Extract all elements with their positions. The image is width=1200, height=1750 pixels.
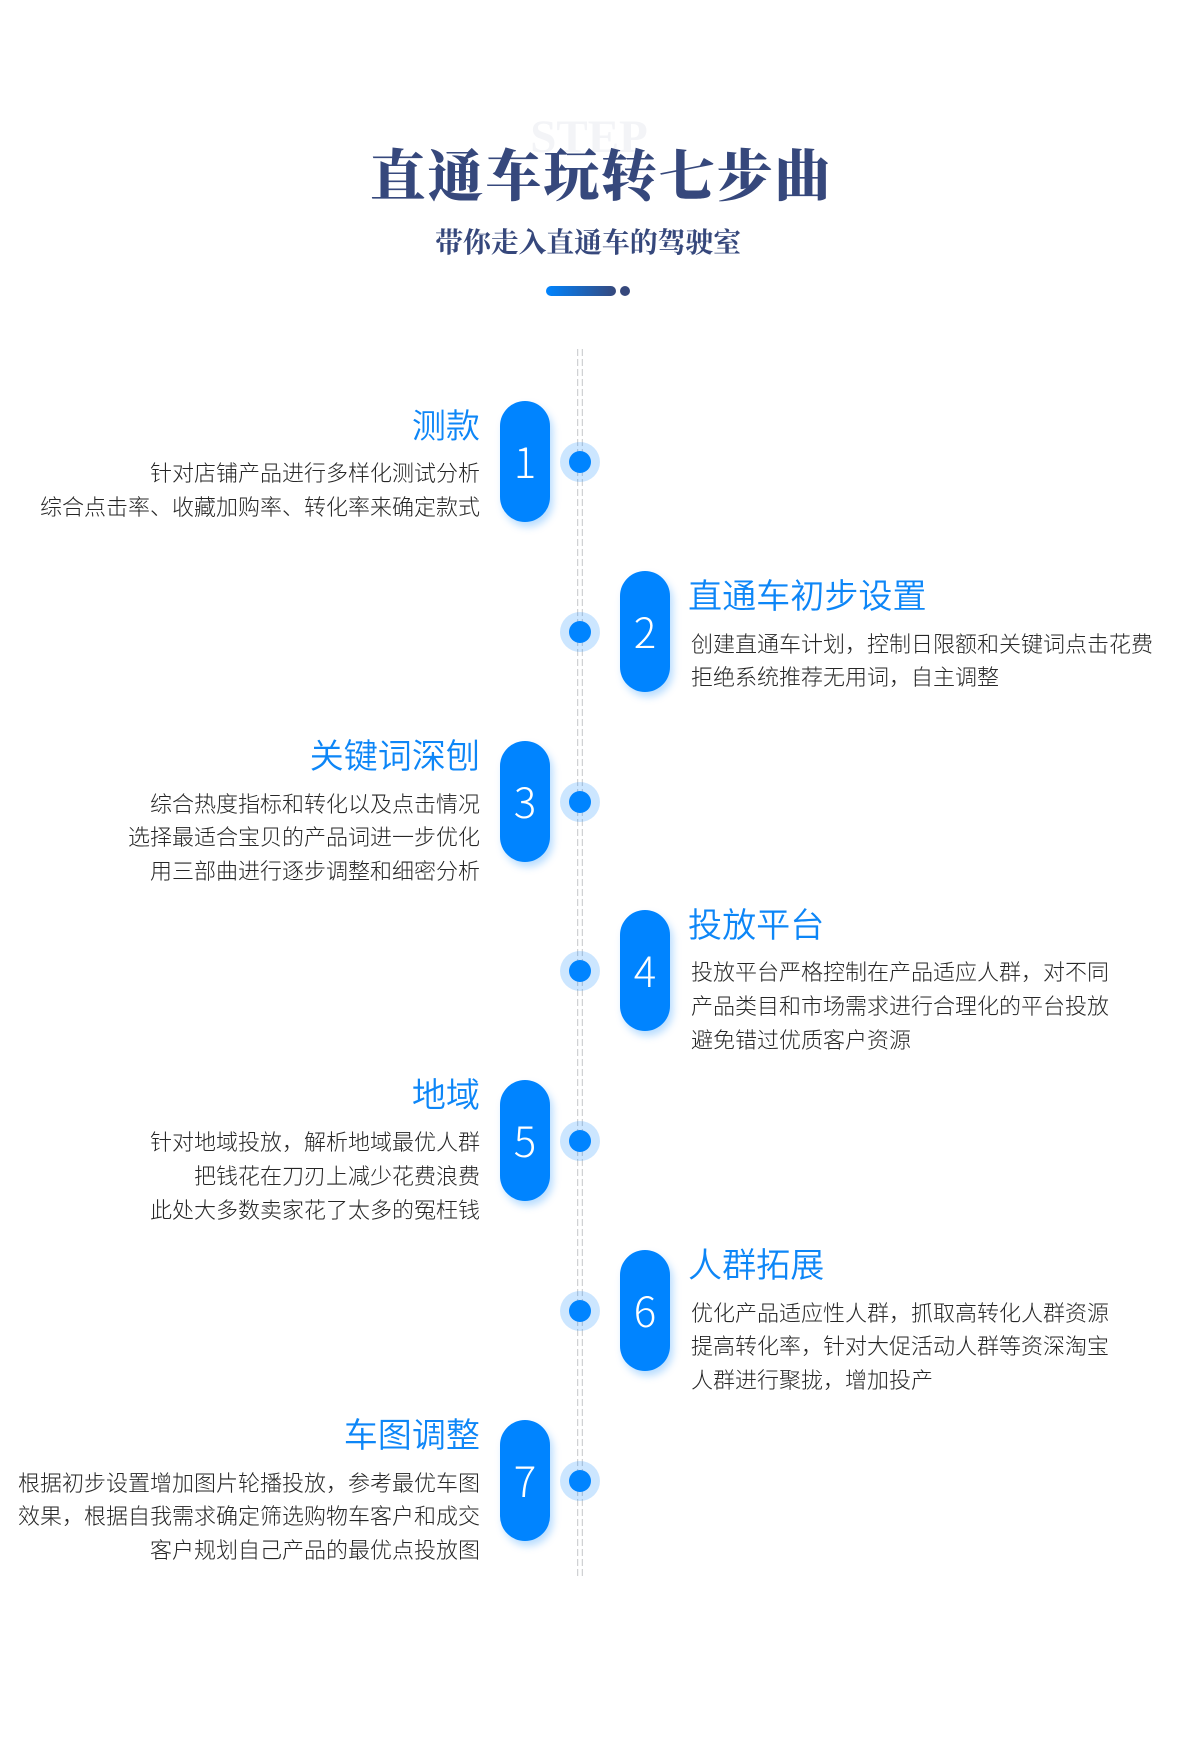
step 4 heading: 投放平台 [688,906,824,944]
step 5 description: 把钱花在刀刃上减少花费浪费 [194,1164,480,1189]
step 6 number pill [620,1250,670,1371]
step 7 number pill: 7 [514,1449,536,1510]
step 1 description [40,461,480,520]
step 1 description: 综合点击率、收藏加购率、转化率来确定款式 [40,495,480,520]
step 2 heading: 直通车初步设置 [688,578,927,616]
step 1 number pill: 1 [514,430,536,491]
subtitle: 带你走入直通车的驾驶室 [435,228,741,258]
step 5 description: 针对地域投放，解析地域最优人群 [150,1130,480,1155]
step 3 timeline dot [560,782,600,822]
step 6 description: 优化产品适应性人群，抓取高转化人群资源 [691,1300,1109,1326]
step 4 number pill: 4 [634,939,656,1000]
step 5 number pill [500,1080,550,1201]
step 2: 直通车初步设置 [560,571,1153,701]
step 3 number pill [500,741,550,862]
step 4: 投放平台 [560,906,1109,1053]
step 7 description: 客户规划自己产品的最优点投放图 [150,1538,480,1563]
step 6 description: 提高转化率，针对大促活动人群等资深淘宝 [691,1334,1109,1359]
step 1: 测款 [40,401,600,531]
step 7 heading: 车图调整 [344,1416,480,1454]
step 3 description [128,792,480,884]
step 1 timeline dot [560,442,600,482]
step 3 description: 用三部曲进行逐步调整和细密分析 [150,859,480,884]
step 5 timeline dot [560,1121,600,1161]
step 4 description: 避免错过优质客户资源 [691,1028,911,1053]
step 7 description: 根据初步设置增加图片轮播投放，参考最优车图 [18,1470,480,1496]
watermark: STEP: STEP [530,111,648,163]
step 2 number pill: 2 [634,600,656,661]
step 1 description: 针对店铺产品进行多样化测试分析 [150,461,480,486]
step 4 number pill [620,910,670,1031]
step 3 description: 选择最适合宝贝的产品词进一步优化 [128,825,480,850]
step 7 description: 效果，根据自我需求确定筛选购物车客户和成交 [18,1504,480,1529]
step 3: 关键词深刨 [128,738,600,884]
step 2 description: 拒绝系统推荐无用词，自主调整 [691,665,999,690]
step 6 description [691,1300,1109,1393]
step 6 description: 人群进行聚拢，增加投产 [691,1368,933,1393]
step 2 number pill [620,571,670,692]
timeline dashed double line [577,349,583,1576]
step 4 description: 投放平台严格控制在产品适应人群，对不同 [691,960,1109,985]
step 7 number pill [500,1420,550,1541]
step 6 number pill: 6 [634,1279,656,1340]
step 5: 地域 [150,1076,600,1223]
step 5 heading: 地域 [412,1076,480,1114]
step 6 heading: 人群拓展 [688,1246,824,1284]
step 6 timeline dot [560,1291,600,1331]
step 7: 车图调整 [18,1416,600,1563]
step 3 description: 综合热度指标和转化以及点击情况 [150,792,480,816]
title: 直通车玩转七步曲 [370,146,832,208]
step 1 heading: 测款 [412,408,480,446]
step 4 timeline dot [560,951,600,991]
step 3 heading: 关键词深刨 [310,738,480,776]
step 1 number pill [500,401,550,522]
step 3 number pill: 3 [514,770,536,831]
step 5 description: 此处大多数卖家花了太多的冤枉钱 [150,1198,480,1223]
step 6: 人群拓展 [560,1246,1109,1393]
step 7 timeline dot [560,1461,600,1501]
step 2 timeline dot [560,612,600,652]
step 4 description [691,960,1109,1053]
step 2 description [691,632,1153,690]
title accent bar [546,286,630,296]
step 5 number pill: 5 [514,1109,536,1170]
step 2 description: 创建直通车计划，控制日限额和关键词点击花费 [691,632,1153,656]
step 5 description [150,1130,480,1223]
step 4 description: 产品类目和市场需求进行合理化的平台投放 [691,994,1109,1019]
step 7 description [18,1470,480,1563]
